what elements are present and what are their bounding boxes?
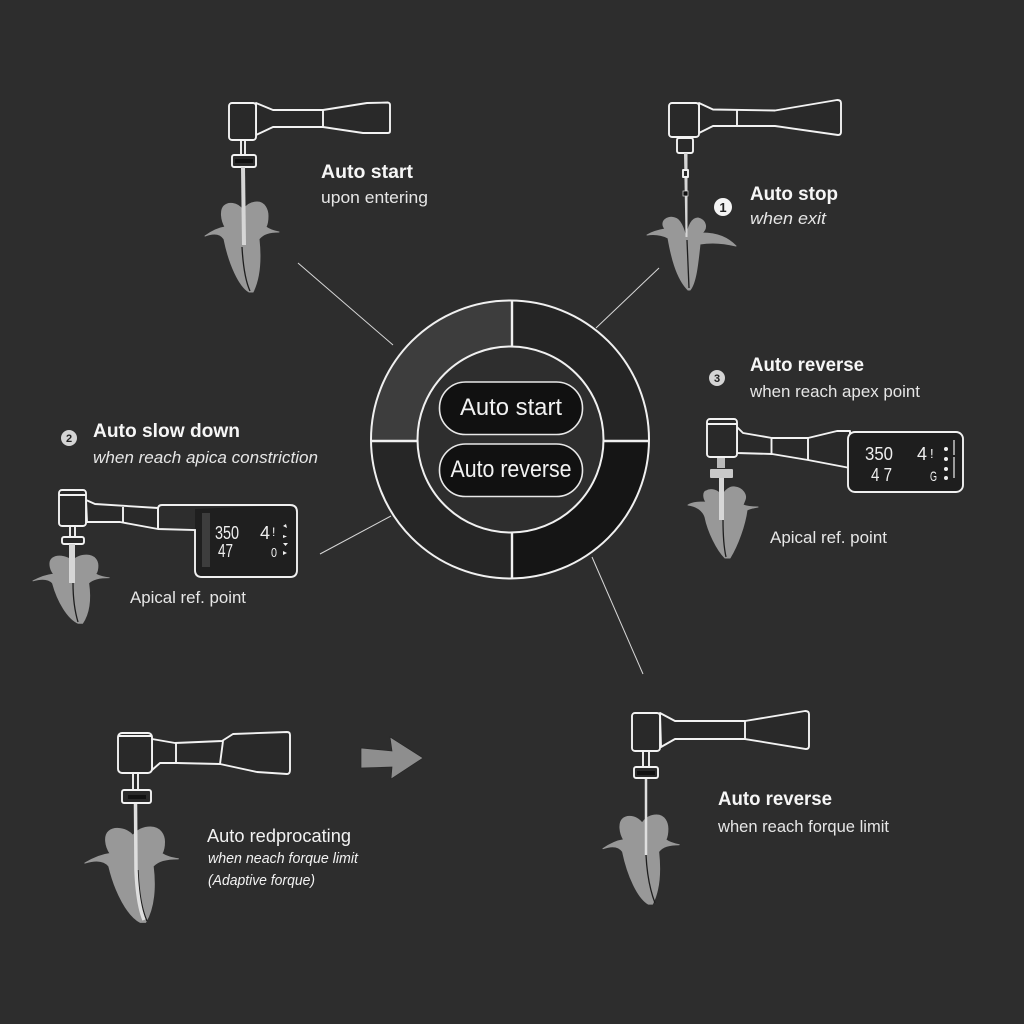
subtext: when reach apica constriction xyxy=(93,448,318,467)
display panel: ! xyxy=(930,446,934,461)
icon: handpiece xyxy=(229,102,390,245)
badge 3 xyxy=(709,370,725,386)
icon: root canal line xyxy=(687,240,689,288)
subtext: (Adaptive forque) xyxy=(208,872,315,889)
icon: tooth xyxy=(85,827,178,922)
heading: Auto reverse xyxy=(750,354,864,376)
icon: handpiece with display xyxy=(707,419,850,520)
icon: tooth xyxy=(205,202,279,292)
icon: tooth xyxy=(603,815,679,904)
icon: handpiece xyxy=(118,732,290,803)
icon: root canal line xyxy=(646,855,655,903)
panel: auto stop xyxy=(647,100,841,290)
icon: tooth xyxy=(688,487,758,558)
subtext: when reach apex point xyxy=(749,382,920,401)
ring inner disc xyxy=(418,346,604,532)
display panel: 350 xyxy=(865,444,893,464)
icon: handpiece with display xyxy=(59,490,158,583)
display panel: G xyxy=(930,468,937,484)
ring quadrant: top right xyxy=(512,300,649,441)
pill: Auto reverse xyxy=(440,444,582,496)
badge 2 xyxy=(61,430,77,446)
heading: Auto start xyxy=(321,161,413,183)
display panel xyxy=(158,505,297,577)
subtext: when exit xyxy=(750,209,827,228)
ring quadrant: top left xyxy=(371,300,512,441)
panel: auto slow down xyxy=(33,420,318,623)
subtext: when reach forque limit xyxy=(717,817,889,836)
icon: handpiece xyxy=(669,100,841,237)
badge 2: 2 xyxy=(66,433,72,445)
heading: Auto redprocating xyxy=(207,826,351,846)
display panel: 0 xyxy=(271,545,277,560)
display panel xyxy=(848,432,963,492)
icon: tooth xyxy=(647,217,736,290)
ring dividers xyxy=(371,300,649,579)
heading: Auto reverse xyxy=(718,788,832,810)
icon: tooth xyxy=(33,555,109,623)
display panel: 4 7 xyxy=(871,465,892,485)
display panel: 350 xyxy=(215,523,239,543)
central ring diagram xyxy=(371,300,649,579)
display panel: 4 xyxy=(260,523,270,543)
pill: Auto start: Auto start xyxy=(460,394,562,421)
icon: root canal line xyxy=(723,520,726,557)
heading: Auto slow down xyxy=(93,420,240,442)
ring quadrant: bottom left xyxy=(371,441,512,579)
badge 3: 3 xyxy=(714,373,720,385)
ring quadrant: bottom right xyxy=(512,441,649,579)
display panel: 47 xyxy=(218,541,233,561)
icon: file in canal xyxy=(136,803,144,920)
subtext: upon entering xyxy=(321,188,428,207)
pill: Auto reverse: Auto reverse xyxy=(450,456,572,483)
display panel: 4 xyxy=(917,444,927,464)
heading: Auto stop xyxy=(750,183,838,205)
badge 1: 1 xyxy=(719,200,727,215)
panel: auto start xyxy=(205,102,428,292)
panel: auto reciprocating xyxy=(85,732,359,922)
ring outer circle xyxy=(371,300,649,578)
icon: file xyxy=(645,778,647,855)
panel: auto reverse at apex xyxy=(688,354,963,558)
panel: auto reverse at torque limit xyxy=(603,711,889,904)
connector lines xyxy=(298,263,659,674)
icon: handpiece xyxy=(632,711,809,778)
label: Apical ref. point xyxy=(130,588,246,607)
display panel: ! xyxy=(272,525,275,539)
icon: root canal line xyxy=(242,247,250,291)
label: Apical ref. point xyxy=(770,528,887,547)
pill: Auto start xyxy=(440,382,582,434)
icon: root canal line xyxy=(138,870,147,921)
subtext: when neach forque limit xyxy=(208,850,359,867)
icon: root canal line xyxy=(73,583,78,622)
badge 1 xyxy=(714,198,732,216)
arrow xyxy=(361,737,423,779)
